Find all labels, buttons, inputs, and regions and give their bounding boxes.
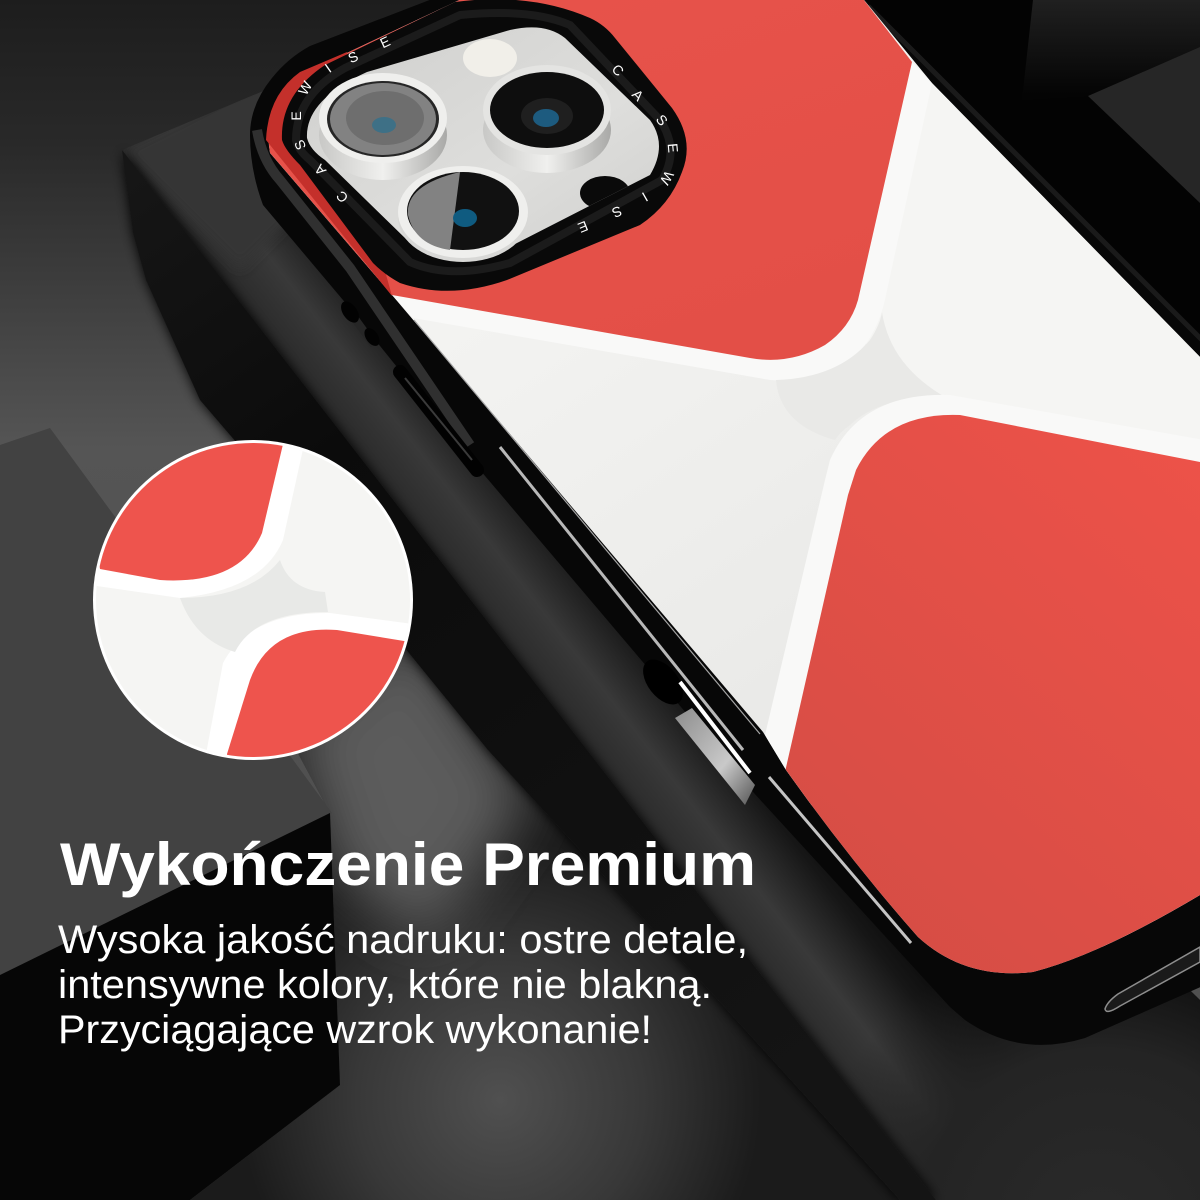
lens: top left bbox=[319, 73, 447, 180]
rim left grey edge bbox=[257, 130, 470, 445]
red upper bbox=[100, 443, 283, 580]
print edge line bbox=[414, 320, 760, 734]
CASEWISE ring lettering, right side: C bbox=[609, 61, 627, 79]
lit floor lower area bbox=[190, 649, 900, 1200]
CASEWISE ring lettering, left side: A bbox=[310, 161, 329, 179]
upper red shape bbox=[269, 0, 912, 360]
CASEWISE ring lettering, left side: E bbox=[288, 111, 304, 121]
lens: top right bbox=[483, 65, 611, 173]
lower white band bbox=[765, 395, 1200, 1000]
heading: Wykończenie Premium bbox=[60, 831, 756, 898]
body text bbox=[58, 918, 748, 1052]
CASEWISE ring lettering, left side: E bbox=[377, 33, 393, 51]
rim right edge bbox=[868, 6, 1200, 343]
side button: small bbox=[337, 298, 383, 349]
upper white band bbox=[392, 62, 932, 381]
zoom circle callout bbox=[80, 440, 420, 770]
CASEWISE ring lettering, right side: A bbox=[629, 86, 647, 104]
center grey mark bbox=[776, 314, 941, 402]
CASEWISE ring lettering, left side bbox=[288, 33, 393, 206]
phone case body bbox=[250, 0, 1200, 1045]
camera glass bbox=[307, 27, 659, 259]
CASEWISE ring lettering, right side: S bbox=[653, 111, 671, 129]
CASEWISE ring lettering, right side bbox=[576, 61, 681, 236]
body text: Wysoka jakość nadruku: ostre detale, bbox=[58, 918, 748, 962]
CASEWISE ring lettering, right side: E bbox=[665, 143, 681, 153]
body text: Przyciągające wzrok wykonanie! bbox=[58, 1008, 652, 1052]
lower red shape bbox=[785, 415, 1200, 985]
top-right dark blocks bbox=[860, 0, 1200, 345]
lower-left block bbox=[0, 428, 340, 1200]
red ribbon shade bbox=[266, 52, 392, 296]
CASEWISE ring lettering, left side: I bbox=[322, 60, 334, 76]
white band upper bbox=[90, 440, 305, 598]
edge highlights bbox=[500, 447, 911, 943]
charging port bbox=[1105, 947, 1200, 1011]
CASEWISE ring lettering, right side: E bbox=[576, 218, 590, 236]
body text: intensywne kolory, które nie blakną. bbox=[58, 963, 712, 1007]
grey centre bbox=[180, 560, 328, 652]
microphone hole bbox=[580, 176, 628, 206]
lens: bottom bbox=[398, 166, 528, 262]
flash bbox=[463, 39, 517, 77]
side button: silver action button bbox=[635, 652, 755, 805]
CASEWISE ring lettering, right side: W bbox=[656, 168, 677, 188]
CASEWISE ring lettering, left side: W bbox=[295, 78, 316, 98]
ring letter band bbox=[296, 13, 671, 271]
CASEWISE ring lettering, right side: S bbox=[610, 203, 624, 221]
white band lower bbox=[207, 613, 408, 754]
CASEWISE ring lettering, left side: C bbox=[333, 188, 351, 206]
right pale panel bbox=[932, 83, 1200, 439]
side button: volume bbox=[400, 372, 477, 470]
CASEWISE ring lettering, left side: S bbox=[291, 137, 309, 153]
CASEWISE ring lettering, right side: I bbox=[639, 189, 651, 205]
CASEWISE ring lettering, left side: S bbox=[345, 48, 361, 66]
red lower bbox=[227, 630, 404, 757]
printed back: red and white pattern bbox=[250, 0, 1200, 1000]
camera surround bbox=[266, 0, 687, 296]
